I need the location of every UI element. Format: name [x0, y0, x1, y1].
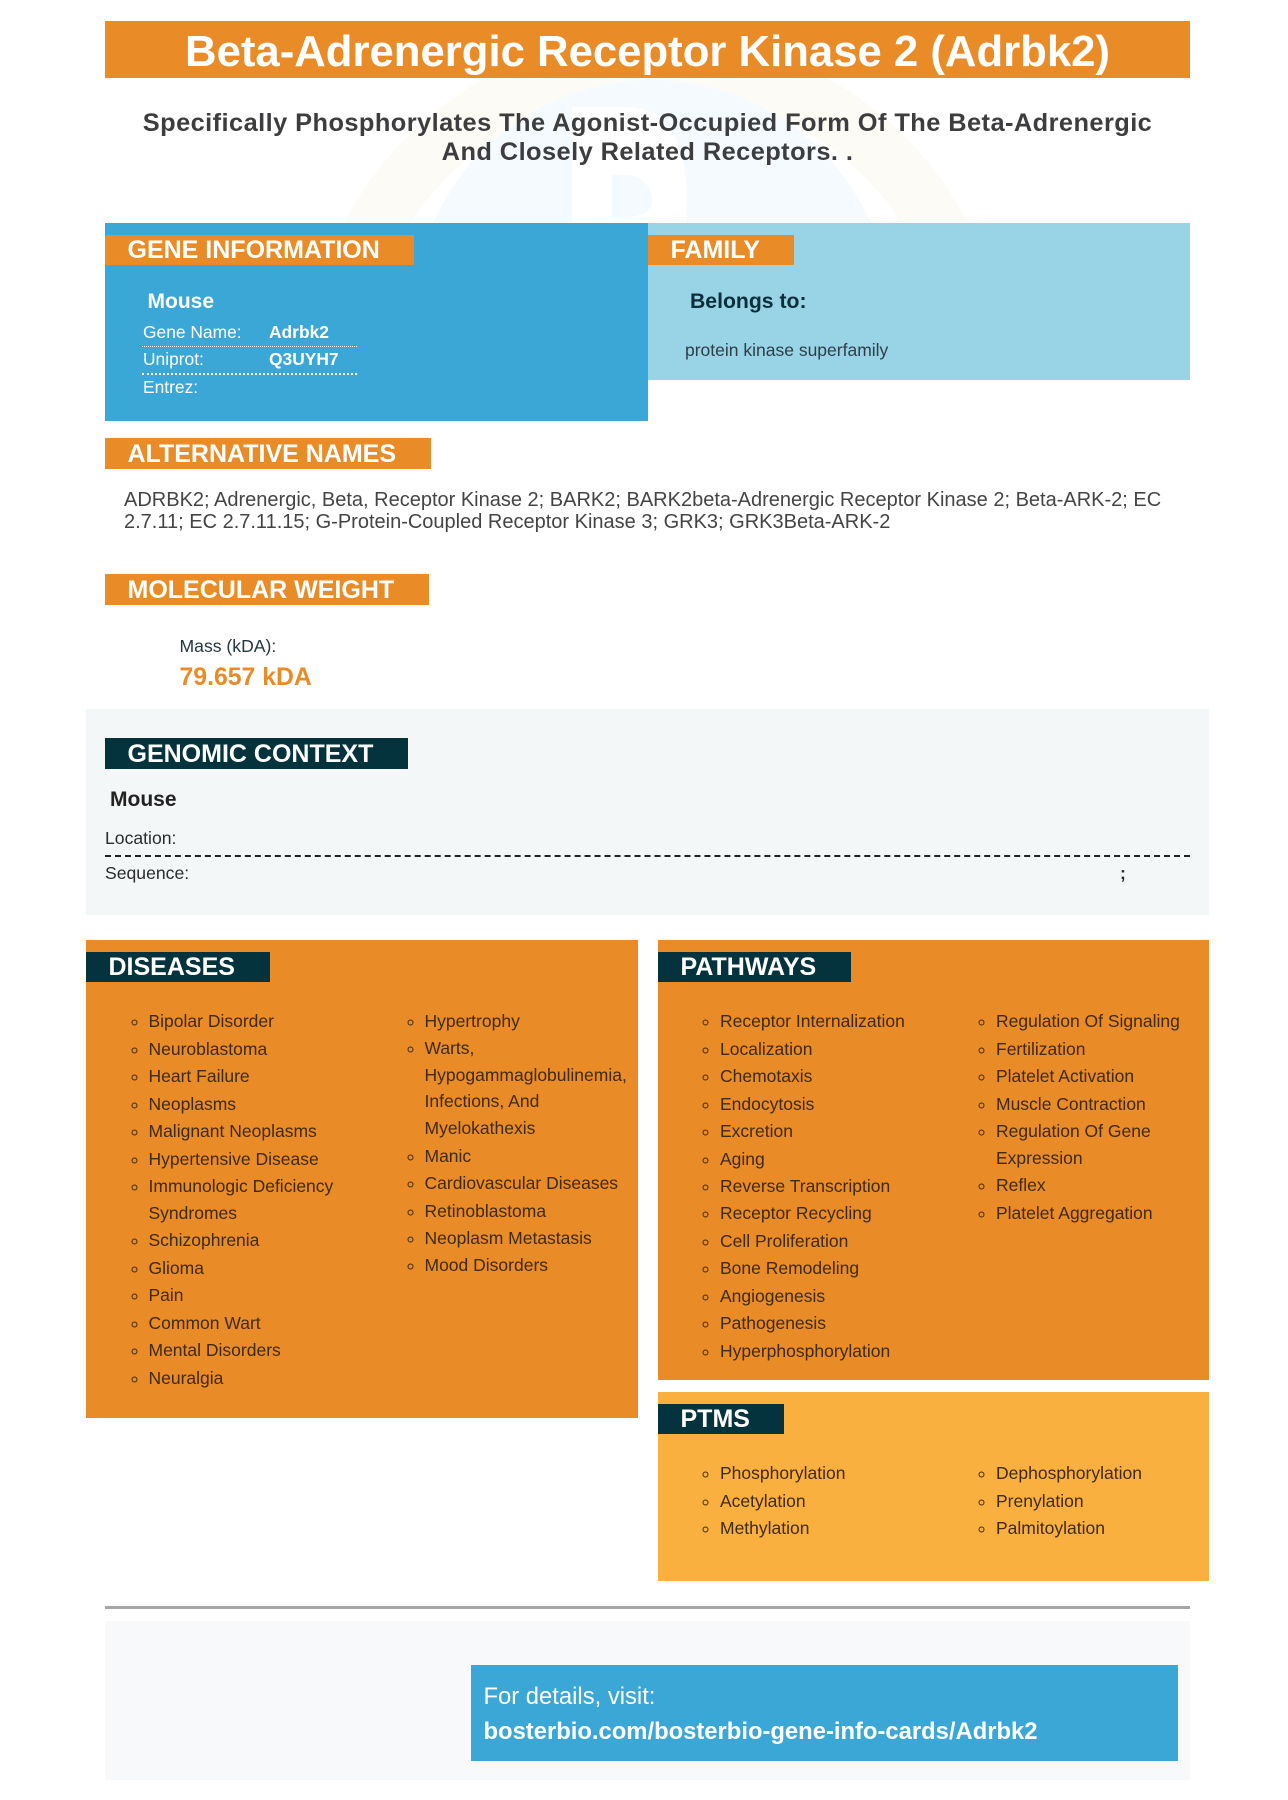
panel: genomic context: [86, 709, 1209, 915]
pathway list column 1: Cell Proliferation: [720, 1231, 848, 1251]
family value: protein kinase superfamily: [685, 340, 888, 360]
pathway list column 2: Regulation Of Gene Expression: [996, 1121, 1151, 1168]
disease list column 2: Mood Disorders: [424, 1255, 548, 1275]
gene name row: Gene Name:: [143, 322, 242, 342]
ptm list column 1: Phosphorylation: [720, 1463, 846, 1483]
callout url: bosterbio.com/bosterbio-gene-info-cards/Adrbk2: [484, 1718, 1038, 1745]
panel: ptms: [658, 1392, 1209, 1581]
ptm list column 1: [702, 1463, 846, 1538]
pathway list column 2: Fertilization: [996, 1039, 1085, 1059]
pathway list column 2: Reflex: [996, 1175, 1046, 1195]
pathway list column 1: Aging: [720, 1149, 765, 1169]
disease list column 1: Schizophrenia: [148, 1230, 259, 1250]
subtitle: [143, 109, 1152, 166]
heading: molecular weight: MOLECULAR WEIGHT: [128, 576, 394, 604]
alternative names text: ADRBK2; Adrenergic, Beta, Receptor Kinase 2; BARK2; BARK2beta-Adrenergic Receptor Kinase 2; Beta-ARK-2; EC 2.7.11; EC 2.7.11.15; G-Protein-Coupled Receptor Kinase 3; GRK3; GRK3Beta-ARK-2: [124, 489, 1161, 533]
ptm list column 2: [978, 1463, 1142, 1538]
pathway list column 1: Chemotaxis: [720, 1066, 812, 1086]
disease list column 1: Mental Disorders: [148, 1340, 281, 1360]
heading: diseases: DISEASES: [108, 953, 235, 981]
pathway list column 1: Angiogenesis: [720, 1286, 825, 1306]
subtitle: Specifically Phosphorylates The Agonist-Occupied Form Of The Beta-Adrenergic: [143, 109, 1152, 137]
pathway list column 1: [702, 1011, 905, 1361]
ptm list column 2: Prenylation: [996, 1491, 1084, 1511]
subtitle: And Closely Related Receptors. .: [442, 138, 853, 166]
disease list column 2: Hypertrophy: [424, 1011, 520, 1031]
gene name row: [142, 318, 357, 347]
heading: genomic context: GENOMIC CONTEXT: [128, 740, 373, 768]
belongs to: Belongs to:: [690, 290, 807, 313]
disease list column 1: Glioma: [148, 1258, 204, 1278]
heading: gene information: GENE INFORMATION: [128, 236, 380, 264]
disease list column 1: Neuralgia: [148, 1368, 223, 1388]
disease list column 1: Hypertensive Disease: [148, 1149, 319, 1169]
disease list column 2: Retinoblastoma: [424, 1201, 546, 1221]
pathway list column 1: Excretion: [720, 1121, 793, 1141]
uniprot row: Q3UYH7: [269, 349, 339, 369]
pathway list column 1: Bone Remodeling: [720, 1258, 859, 1278]
uniprot row: Uniprot:: [143, 349, 204, 369]
panel: pathways: [658, 940, 1209, 1380]
heading: ptms: [658, 1404, 784, 1434]
footer rule: [105, 1606, 1190, 1609]
disease list column 2: Cardiovascular Diseases: [424, 1173, 618, 1193]
title banner: [105, 21, 1190, 78]
pathway list column 2: [978, 1011, 1180, 1223]
disease list column 1: [132, 1011, 334, 1388]
disease list column 1: Malignant Neoplasms: [148, 1121, 317, 1141]
gene name row: Adrbk2: [269, 322, 329, 342]
heading: family: [648, 235, 794, 265]
disease list column 1: Neoplasms: [148, 1094, 236, 1114]
ptm list column 2: Dephosphorylation: [996, 1463, 1142, 1483]
disease list column 1: Heart Failure: [148, 1066, 250, 1086]
pathway list column 1: Endocytosis: [720, 1094, 814, 1114]
disease list column 1: Immunologic Deficiency Syndromes: [148, 1176, 333, 1223]
pathway list column 1: Reverse Transcription: [720, 1176, 890, 1196]
pathway list column 1: Localization: [720, 1039, 812, 1059]
callout: details link: [471, 1665, 1178, 1761]
pathway list column 1: Pathogenesis: [720, 1313, 826, 1333]
disease list column 1: Neuroblastoma: [148, 1039, 267, 1059]
species: Mouse: [148, 290, 214, 313]
ptm list column 2: Palmitoylation: [996, 1518, 1105, 1538]
panel: family: [648, 223, 1190, 380]
heading: pathways: PATHWAYS: [680, 953, 816, 981]
disease list column 2: Manic: [424, 1146, 471, 1166]
callout label: For details, visit:: [484, 1683, 655, 1710]
panel: footer: [105, 1621, 1190, 1780]
location label: Location:: [105, 828, 176, 848]
title text: Beta-Adrenergic Receptor Kinase 2 (Adrbk2): [185, 27, 1110, 76]
disease list column 1: Pain: [148, 1285, 184, 1305]
pathway list column 1: Hyperphosphorylation: [720, 1341, 890, 1361]
disease list column 2: [408, 1011, 627, 1275]
heading: ptms: PTMS: [680, 1405, 750, 1433]
disease list column 2: Neoplasm Metastasis: [424, 1228, 592, 1248]
disease list column 1: Bipolar Disorder: [148, 1011, 274, 1031]
sequence label: Sequence:: [105, 863, 189, 883]
heading: pathways: [658, 952, 851, 982]
heading: family: FAMILY: [670, 236, 760, 264]
dashed divider: [105, 855, 1190, 857]
uniprot row: [142, 347, 357, 375]
pathway list column 1: Receptor Internalization: [720, 1011, 905, 1031]
species: Mouse: [110, 788, 177, 811]
entrez row: Entrez:: [143, 377, 198, 397]
pathway list column 2: Regulation Of Signaling: [996, 1011, 1180, 1031]
background watermark: [344, 78, 968, 223]
ptm list column 1: Acetylation: [720, 1491, 806, 1511]
mass label: Mass (kDA):: [180, 636, 276, 656]
heading: diseases: [86, 952, 270, 982]
heading: alternative names: ALTERNATIVE NAMES: [128, 440, 396, 468]
disease list column 2: Warts, Hypogammaglobulinemia, Infections, And Myelokathexis: [424, 1038, 627, 1138]
ptm list column 1: Methylation: [720, 1518, 810, 1538]
mass value: 79.657 kDA: [180, 664, 312, 691]
disease list column 1: Common Wart: [148, 1313, 261, 1333]
panel: diseases: [86, 940, 638, 1418]
panel: gene information: [105, 223, 648, 421]
pathway list column 1: Receptor Recycling: [720, 1203, 872, 1223]
pathway list column 2: Platelet Activation: [996, 1066, 1134, 1086]
pathway list column 2: Muscle Contraction: [996, 1094, 1146, 1114]
separator glyph: ;: [1120, 863, 1126, 883]
pathway list column 2: Platelet Aggregation: [996, 1203, 1153, 1223]
